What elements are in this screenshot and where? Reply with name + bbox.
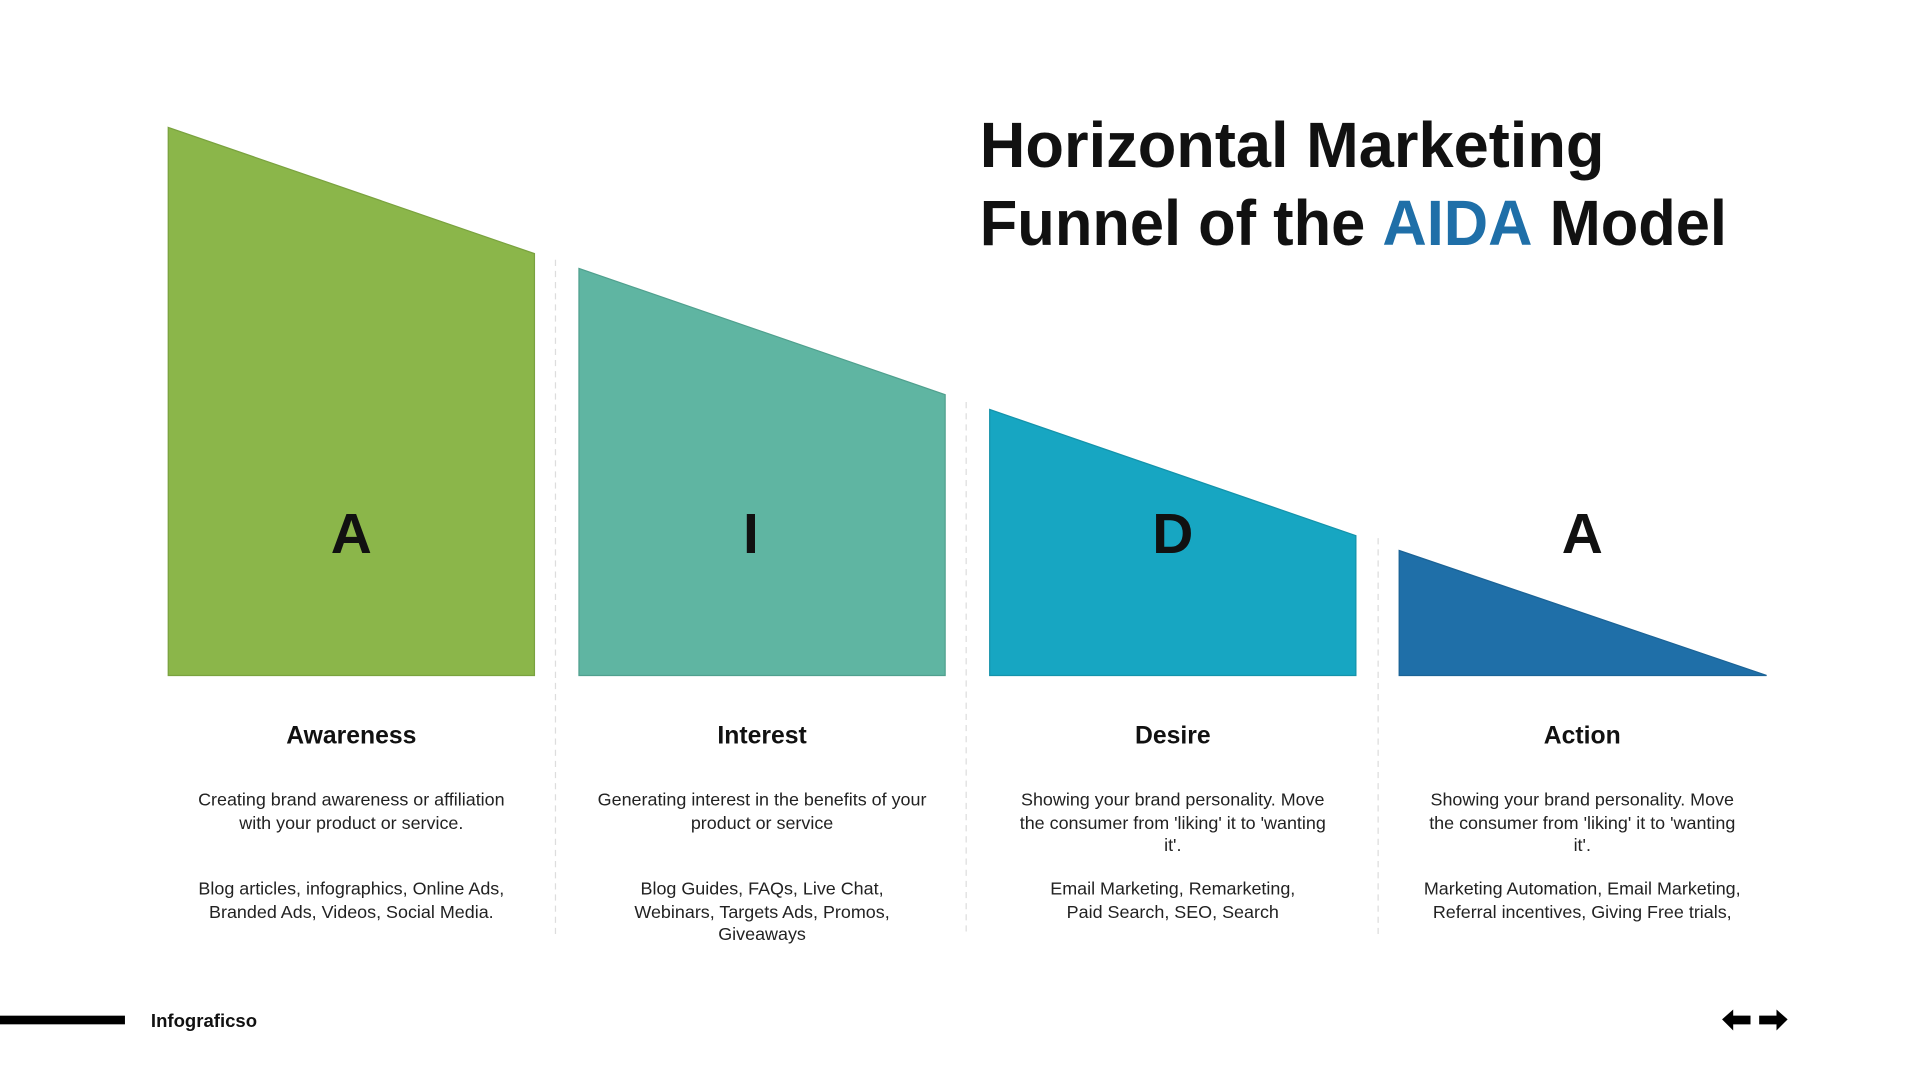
footer brand: Infograficso (151, 1010, 257, 1031)
shape: action (1399, 551, 1767, 675)
text: action description (1424, 789, 1741, 922)
text: desire description (1020, 789, 1326, 922)
text: interest description: product or service (691, 813, 833, 833)
shape: interest (579, 268, 945, 675)
text: desire description: the consumer from 'liking' it to 'wanting (1020, 813, 1326, 833)
heading: Awareness: Awareness (286, 723, 416, 750)
text: interest description: Giveaways (718, 924, 806, 944)
text: awareness description (198, 789, 505, 922)
text: interest description: Generating interest in the benefits of your (598, 789, 926, 809)
letter I: I (743, 502, 759, 566)
footer bar (0, 1016, 125, 1024)
letter A: A (1562, 502, 1603, 566)
text: interest description: Webinars, Targets Ads, Promos, (634, 902, 890, 922)
panel: interest (579, 268, 945, 944)
panel: action (1399, 502, 1767, 922)
title (980, 109, 1727, 259)
icon: navigation arrows (1722, 1009, 1788, 1031)
shape: desire (990, 409, 1356, 675)
heading: Action: Action (1544, 723, 1621, 750)
letter A: A (331, 502, 372, 566)
text: desire description: Showing your brand personality. Move (1021, 789, 1325, 809)
text: awareness description: Blog articles, infographics, Online Ads, (198, 878, 504, 898)
letter D: D (1152, 502, 1193, 566)
text: desire description: it'. (1164, 835, 1181, 855)
text: interest description (598, 789, 926, 944)
text: action description: it'. (1574, 835, 1591, 855)
text: action description: Referral incentives, Giving Free trials, (1433, 902, 1732, 922)
title: Horizontal Marketing (980, 109, 1605, 181)
text: awareness description: with your product or service. (238, 813, 463, 833)
title: Funnel of the AIDA Model (980, 187, 1727, 259)
shape: awareness (168, 127, 534, 675)
text: action description: Marketing Automation, Email Marketing, (1424, 878, 1741, 898)
text: action description: Showing your brand personality. Move (1431, 789, 1734, 809)
text: awareness description: Creating brand awareness or affiliation (198, 789, 505, 809)
text: awareness description: Branded Ads, Videos, Social Media. (209, 902, 494, 922)
heading: Desire: Desire (1135, 723, 1211, 750)
heading: Interest: Interest (717, 723, 807, 750)
panel: desire (990, 409, 1356, 922)
text: interest description: Blog Guides, FAQs, Live Chat, (641, 878, 884, 898)
panel: awareness (168, 127, 534, 922)
text: action description: the consumer from 'liking' it to 'wanting (1429, 813, 1735, 833)
text: desire description: Email Marketing, Remarketing, (1050, 878, 1295, 898)
text: desire description: Paid Search, SEO, Search (1067, 902, 1279, 922)
